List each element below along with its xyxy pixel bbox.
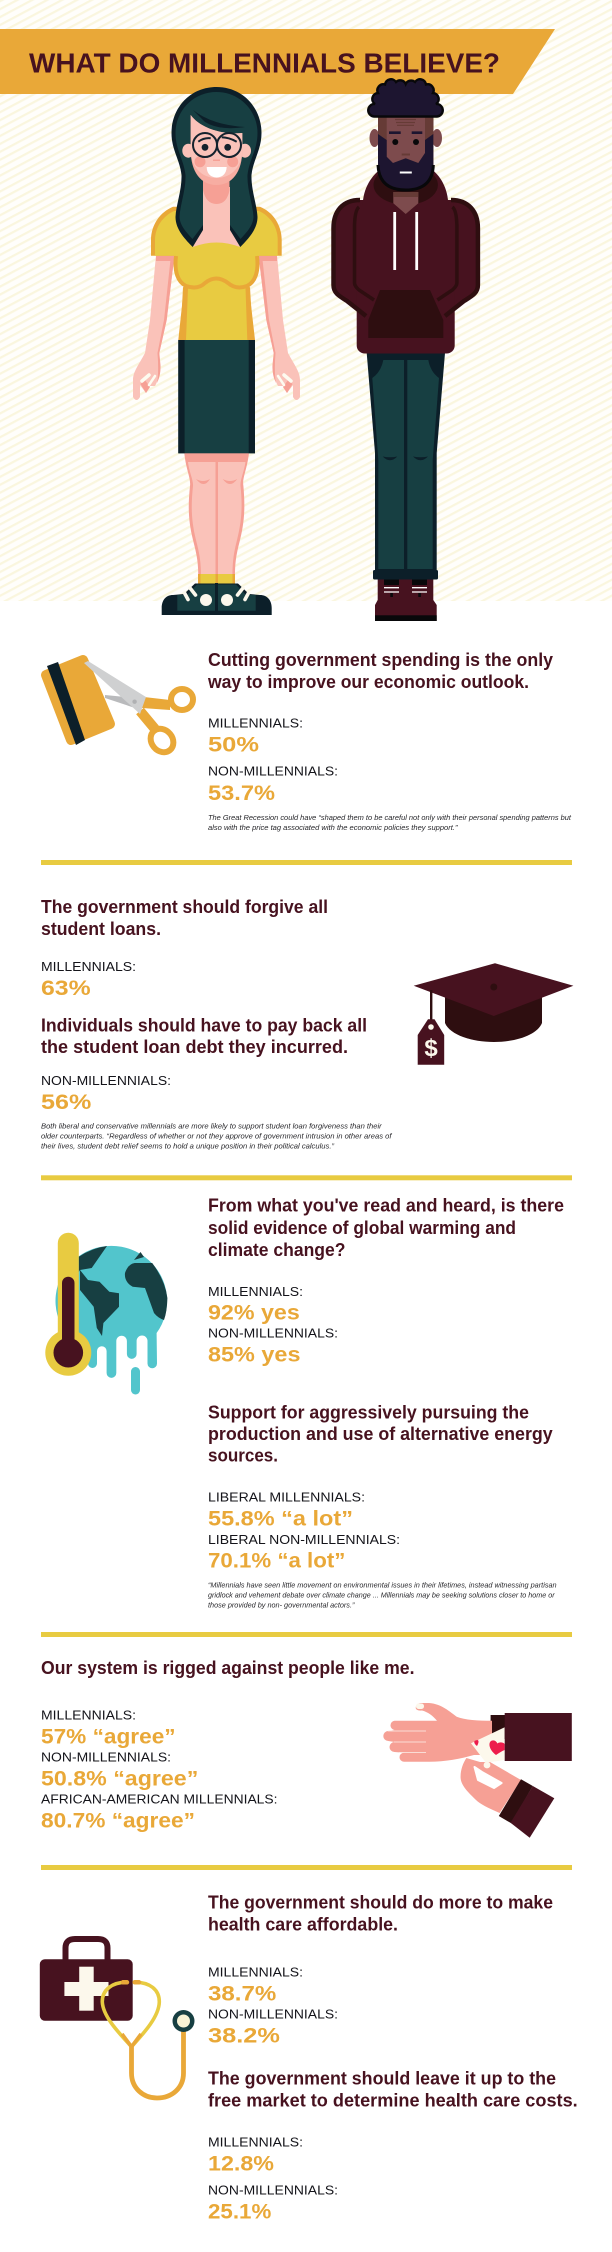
statistic: non-millennials: NON-MILLENNIALS:	[208, 1326, 338, 1341]
heading: pay back debt	[41, 1015, 367, 1057]
statistic: millennials: MILLENNIALS:	[208, 2134, 303, 2149]
man afro hair	[368, 79, 443, 116]
statistic: millennials	[208, 1964, 303, 2005]
statistic: millennials: MILLENNIALS:	[41, 1708, 136, 1723]
statistic: millennials: 50%	[208, 734, 259, 757]
heading: alternative energy	[208, 1402, 553, 1466]
panel: health care	[40, 1892, 578, 2223]
heading: Our system is rigged against people like me.	[41, 1658, 414, 1678]
panel: student loans	[41, 897, 573, 1151]
heading: affordable care: health care affordable.	[208, 1914, 398, 1934]
heading: forgive loans: student loans.	[41, 919, 161, 939]
man hoodie	[334, 165, 478, 354]
title: WHAT DO MILLENNIALS BELIEVE?	[29, 48, 500, 79]
woman hair	[172, 87, 262, 247]
statistic: millennials	[208, 2134, 303, 2175]
icon: graduation cap with price tag: $	[424, 1035, 438, 1062]
statistic: liberal millennials: 55.8% “a lot”	[208, 1508, 353, 1531]
woman sneakers	[162, 583, 272, 615]
heading: Cutting government spending is the only	[208, 650, 553, 670]
note: older counterparts. “Regardless of whether or not they approve of government intrusion in other areas of	[41, 1132, 392, 1141]
statistic: african-american millennials: AFRICAN-AMERICAN MILLENNIALS:	[41, 1792, 278, 1807]
man boots	[375, 575, 437, 621]
statistic: millennials: MILLENNIALS:	[208, 716, 303, 731]
panel: rigged system	[41, 1658, 572, 1838]
statistic: non-millennials: NON-MILLENNIALS:	[208, 2006, 338, 2021]
icon: hands with card up sleeve	[383, 1703, 572, 1838]
statistic: non-millennials: NON-MILLENNIALS:	[41, 1750, 171, 1765]
note: those provided by non- governmental actors.”	[208, 1601, 355, 1610]
panel: climate change	[45, 1196, 564, 1610]
heading: pay back debt: the student loan debt they incurred.	[41, 1037, 348, 1057]
icon: melting globe and thermometer	[45, 1233, 167, 1394]
icon: graduation cap with price tag	[414, 963, 573, 1065]
note: The Great Recession could have “shaped them to be careful not only with their personal spending patterns but	[208, 813, 572, 822]
statistic: liberal millennials: LIBERAL MILLENNIALS:	[208, 1490, 365, 1505]
statistic: millennials	[208, 1284, 303, 1324]
woman legs	[184, 453, 249, 576]
statistic: millennials	[208, 716, 303, 757]
statistic: millennials: MILLENNIALS:	[208, 1284, 303, 1299]
heading: alternative energy: sources.	[208, 1446, 278, 1466]
heading: forgive loans	[41, 897, 328, 939]
heading: global warming: climate change?	[208, 1240, 346, 1260]
statistic: non-millennials	[208, 1326, 338, 1367]
note: gridlock and vehement debate over climate change ... Millennials may be seeking solutions closer to home or	[208, 1591, 555, 1600]
statistic: non-millennials: 38.2%	[208, 2024, 280, 2047]
statistic: millennials: 92% yes	[208, 1301, 300, 1324]
heading: alternative energy: Support for aggressively pursuing the	[208, 1402, 529, 1422]
heading: free market: free market to determine health care costs.	[208, 2090, 578, 2110]
statistic: non-millennials	[208, 2182, 338, 2223]
statistic: non-millennials: 53.7%	[208, 782, 275, 805]
statistic: non-millennials: 85% yes	[208, 1344, 300, 1367]
illustration: man in hoodie	[334, 79, 478, 621]
statistic: non-millennials: 25.1%	[208, 2200, 272, 2223]
heading: pay back debt: Individuals should have to pay back all	[41, 1015, 367, 1035]
statistic: non-millennials: NON-MILLENNIALS:	[208, 2182, 338, 2197]
heading: way to improve our economic outlook.	[207, 672, 529, 692]
heading: global warming	[208, 1196, 564, 1260]
heading: affordable care: The government should do more to make	[208, 1892, 553, 1912]
statistic: liberal non-millennials: 70.1% “a lot”	[208, 1550, 345, 1573]
statistic: non-millennials	[208, 764, 338, 805]
note	[208, 1581, 557, 1610]
heading	[207, 650, 553, 692]
note	[41, 1122, 392, 1151]
statistic: liberal non-millennials	[208, 1532, 400, 1573]
statistic: millennials: 57% “agree”	[41, 1725, 176, 1748]
woman neck and chest	[193, 185, 240, 247]
heading: affordable care	[208, 1892, 553, 1934]
icon: medical bag and stethoscope	[40, 1939, 194, 2098]
statistic: african-american millennials	[41, 1792, 278, 1833]
statistic: millennials: MILLENNIALS:	[208, 1964, 303, 1979]
note: their lives, student debt relief seems to hold a unique position in their political calculus.”	[41, 1142, 335, 1151]
statistic: non-millennials: NON-MILLENNIALS:	[41, 1073, 171, 1088]
statistic: non-millennials	[208, 2006, 338, 2047]
man trouser cuffs	[373, 570, 438, 580]
woman yellow top	[151, 207, 282, 340]
title banner	[0, 29, 555, 94]
statistic: non-millennials: NON-MILLENNIALS:	[208, 764, 338, 779]
woman face	[182, 110, 251, 185]
statistic: millennials: 38.7%	[208, 1982, 277, 2005]
statistic: liberal millennials	[208, 1490, 365, 1531]
woman socks	[198, 574, 235, 584]
statistic: millennials	[41, 959, 136, 1000]
man trousers	[367, 353, 445, 572]
woman arms	[133, 255, 300, 400]
icon: scissors cutting credit card	[46, 660, 193, 757]
statistic: non-millennials: 50.8% “agree”	[41, 1768, 198, 1791]
woman skirt	[178, 340, 255, 453]
woman neck shadow	[203, 180, 230, 204]
statistic: millennials: 12.8%	[208, 2152, 274, 2175]
statistic: millennials: 63%	[41, 977, 91, 1000]
panel: government spending	[46, 650, 572, 832]
statistic: millennials	[41, 1708, 176, 1748]
illustration: woman with glasses	[133, 87, 300, 615]
heading: forgive loans: The government should forgive all	[41, 897, 328, 917]
statistic: millennials: MILLENNIALS:	[41, 959, 136, 974]
statistic: non-millennials: 56%	[41, 1091, 92, 1114]
heading: free market	[208, 2068, 578, 2110]
heading: global warming: solid evidence of global warming and	[208, 1218, 516, 1238]
statistic: non-millennials	[41, 1073, 171, 1114]
heading: global warming: From what you've read and heard, is there	[208, 1196, 564, 1216]
note: Both liberal and conservative millennials are more likely to support student loan forgiveness than their	[41, 1122, 382, 1131]
statistic: liberal non-millennials: LIBERAL NON-MILLENNIALS:	[208, 1532, 400, 1547]
note	[208, 813, 572, 832]
statistic: african-american millennials: 80.7% “agree”	[41, 1810, 195, 1833]
heading: alternative energy: production and use of alternative energy	[208, 1424, 553, 1444]
note: “Millennials have seen little movement on environmental issues in their lifetimes, instead witnessing partisan	[208, 1581, 557, 1590]
man head	[370, 112, 442, 190]
statistic: non-millennials	[41, 1750, 198, 1791]
heading: free market: The government should leave it up to the	[208, 2068, 556, 2088]
note: also with the price tag associated with the economic policies they support.”	[208, 823, 458, 832]
